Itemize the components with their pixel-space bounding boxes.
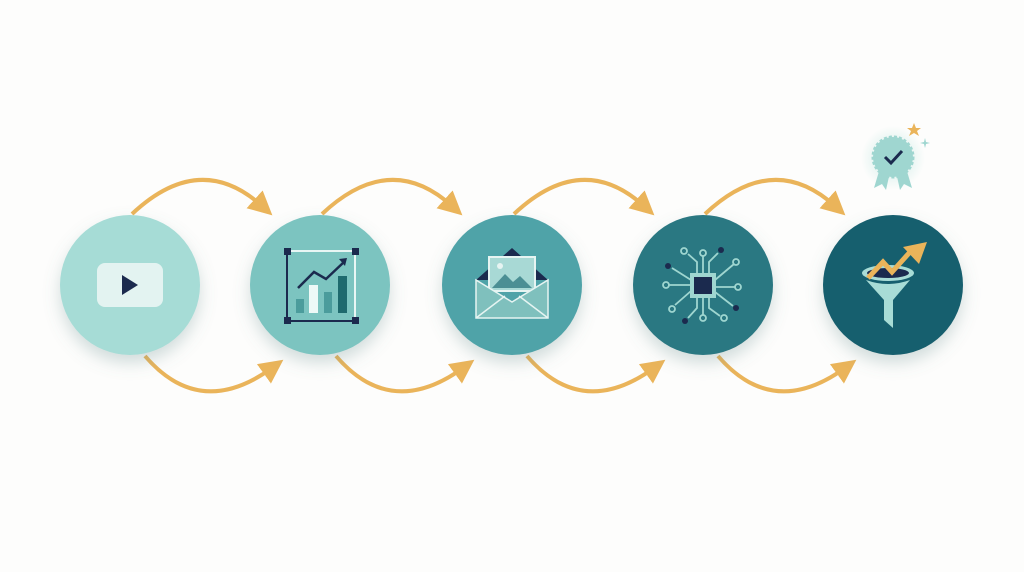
step 1: video circle: [60, 215, 200, 355]
step 2: analytics circle: [250, 215, 390, 355]
arrows: top connectors: [132, 180, 835, 214]
icon: envelope with image: [476, 248, 548, 318]
arrows: bottom connectors: [145, 356, 845, 391]
step 4: AI chip circle: [633, 215, 773, 355]
step 5: funnel circle: [823, 215, 963, 355]
icon: star: [907, 123, 921, 136]
step 3: email circle: [442, 215, 582, 355]
icon: circuit chip: [663, 247, 741, 324]
badge: verified ribbon: [861, 123, 930, 190]
icon: play button: [97, 263, 163, 307]
icon: funnel with growth arrow: [862, 242, 927, 328]
icon: chart: [284, 248, 359, 324]
